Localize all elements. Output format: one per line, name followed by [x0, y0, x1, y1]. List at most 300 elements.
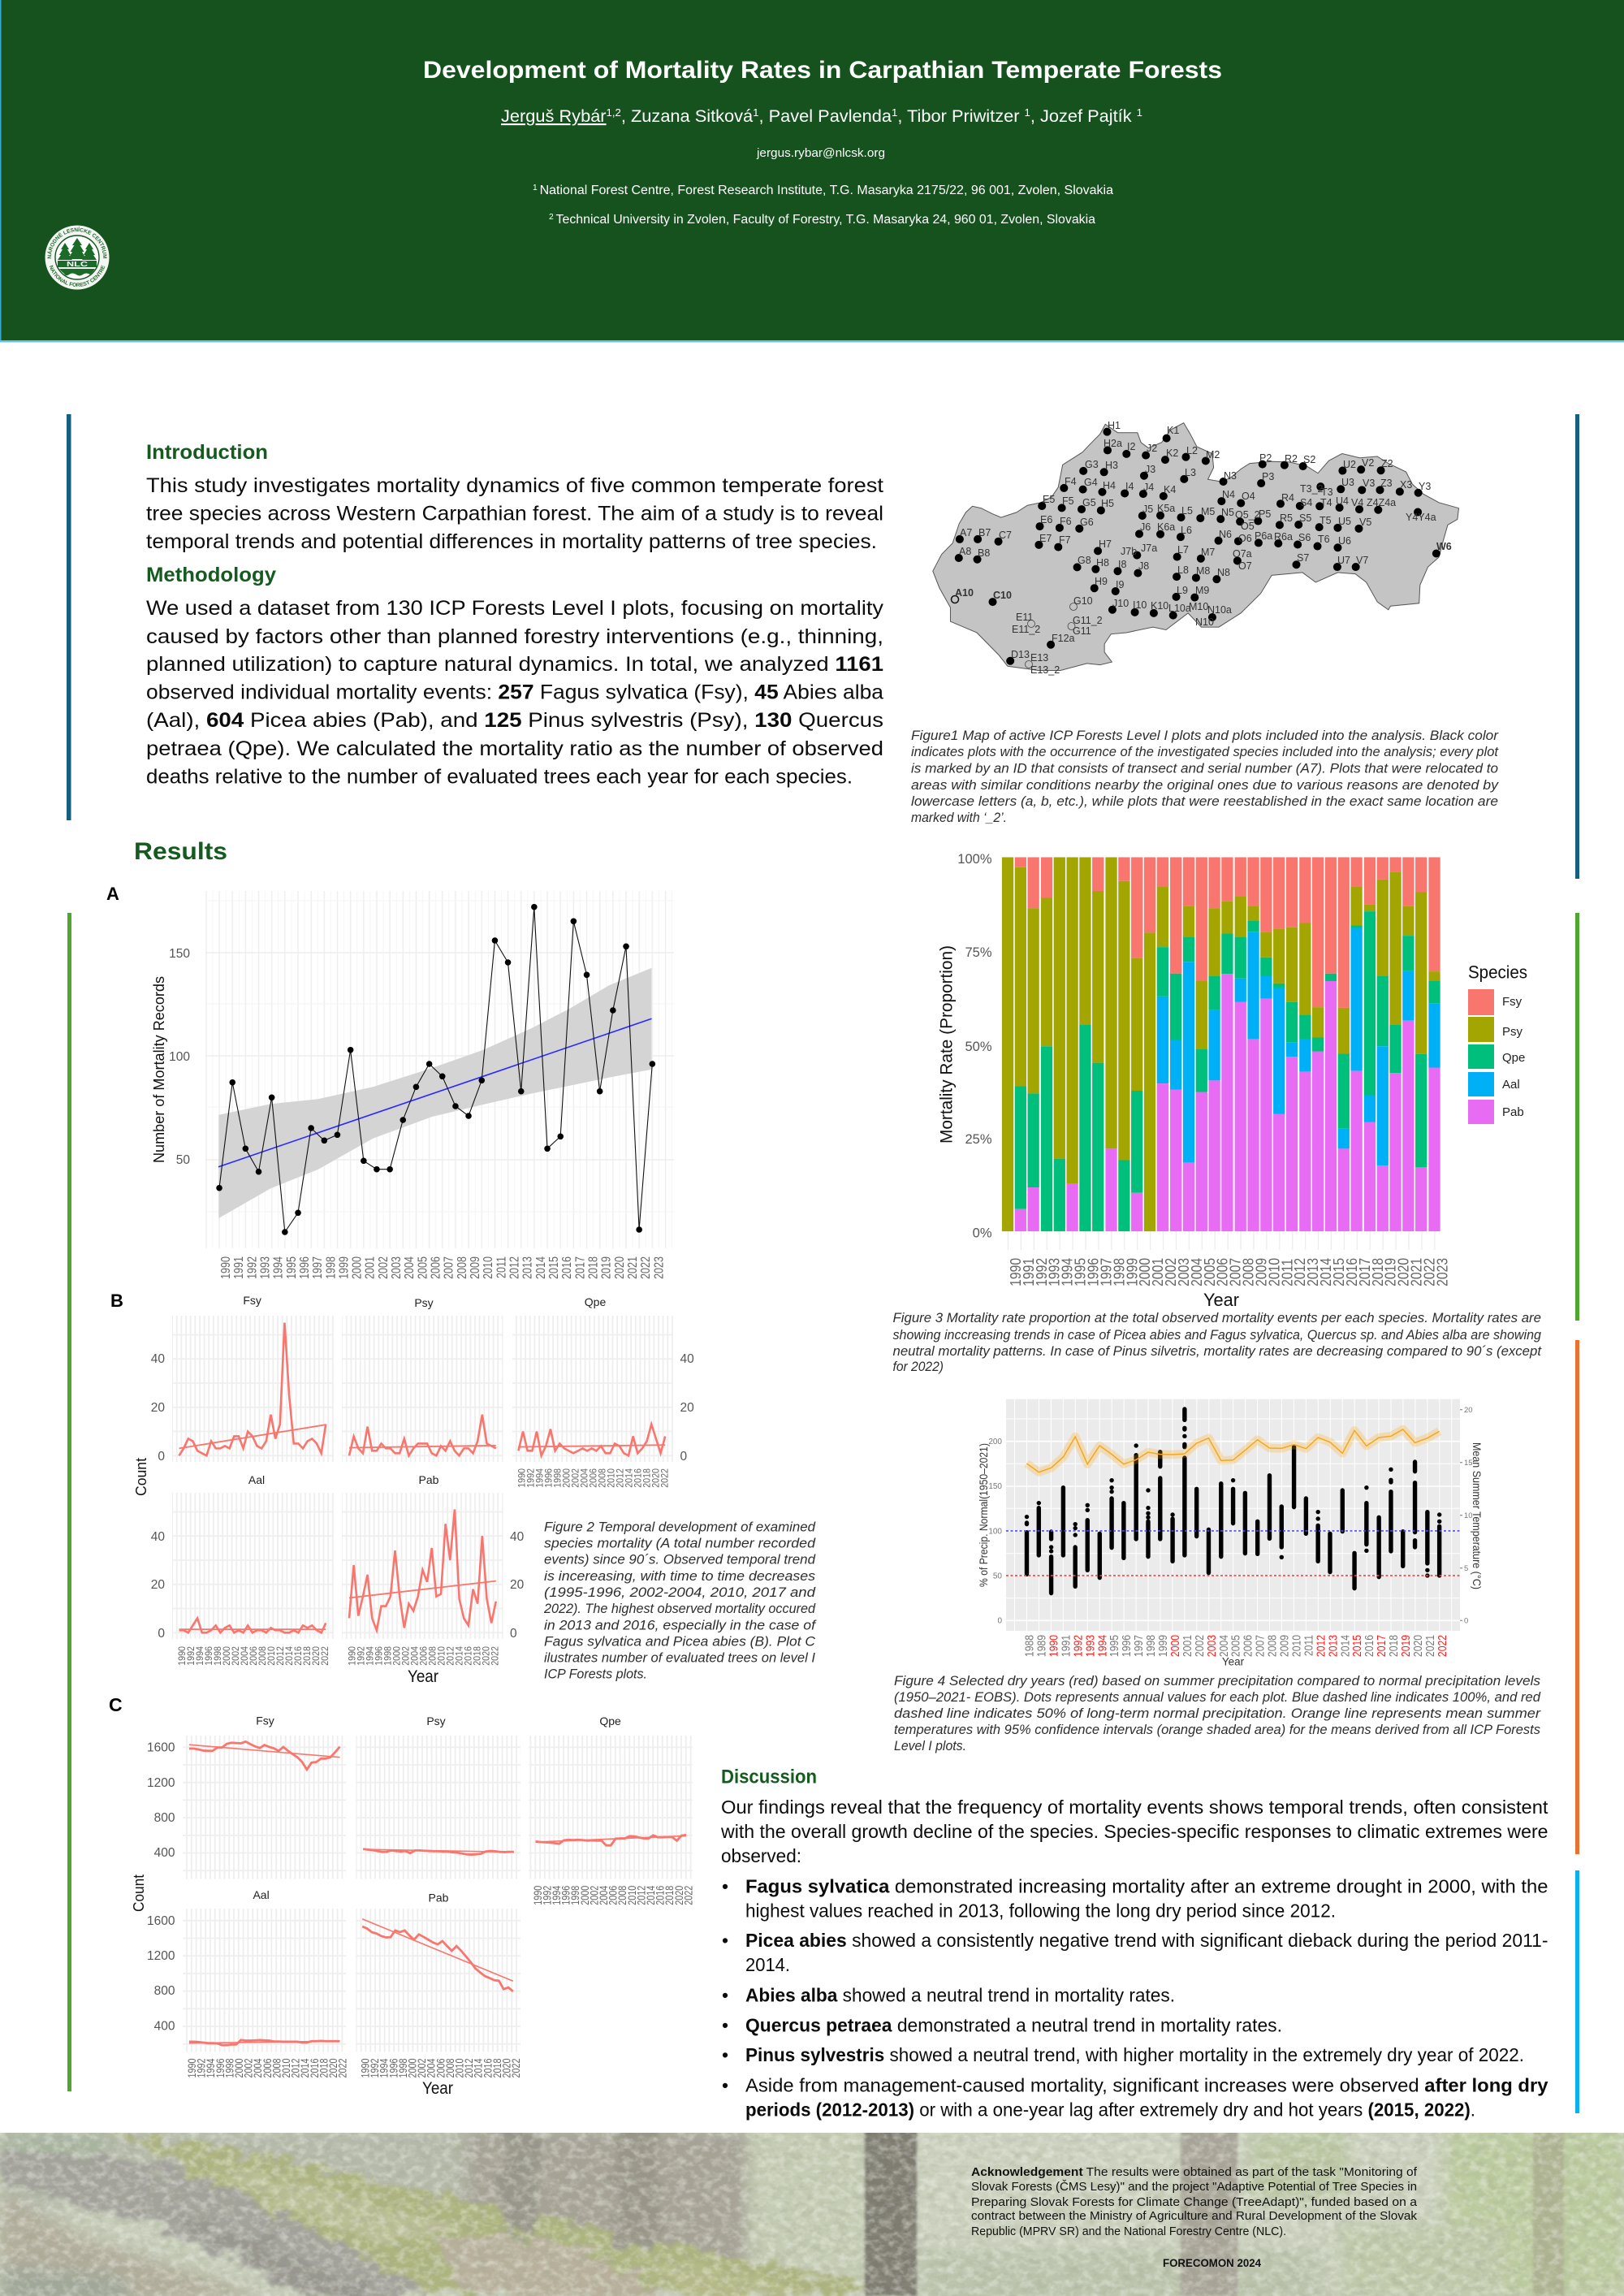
- map of ICP Forests plots: N5: [1221, 507, 1234, 518]
- map of ICP Forests plots: V2: [1362, 457, 1374, 469]
- discussion bullet list: •: [722, 2015, 728, 2036]
- legend: species: Species: [1468, 962, 1527, 983]
- x axis labels: 2009: [1252, 1258, 1270, 1286]
- map of ICP Forests plots: R6a: [1274, 531, 1293, 543]
- map of ICP Forests plots: H3: [1105, 460, 1118, 471]
- y axis labels: 0: [158, 1627, 165, 1641]
- y axis labels: 1200: [147, 1776, 175, 1790]
- map of ICP Forests plots: [933, 420, 1458, 676]
- right axis title: Mean Summer Temperature (°C): [1471, 1442, 1484, 1589]
- tree trunks: [865, 2128, 1564, 2296]
- facet: Fsy: [189, 1741, 339, 1770]
- authors: 1,2: [607, 106, 621, 119]
- x axis labels: 1993: [258, 1256, 273, 1279]
- x axis labels: 1999: [1156, 1635, 1169, 1657]
- map of ICP Forests plots: G11_2: [1073, 615, 1103, 626]
- temperature confidence band: [1026, 1429, 1440, 1472]
- right axis labels: 0: [1464, 1616, 1468, 1626]
- map of ICP Forests plots: J3: [1145, 464, 1155, 475]
- x axis labels: 1994: [1095, 1634, 1109, 1657]
- x axis labels: 1995: [1071, 1258, 1089, 1286]
- bars: Pab: [1015, 974, 1440, 1231]
- x axis labels: Qpe: 2004: [598, 1886, 610, 1905]
- map of ICP Forests plots: O4: [1242, 491, 1255, 502]
- figure 4 caption: Level I plots.: [894, 1738, 966, 1753]
- x axis labels: 2016: [1343, 1258, 1360, 1286]
- methodology text: caused by factors other than planned forestry interventions (e.g., thinning,: [146, 625, 883, 648]
- x axis labels: Aal: 2000: [233, 2058, 245, 2078]
- x axis labels: Pab: 2010: [453, 2058, 466, 2078]
- map of ICP Forests plots: R5: [1280, 512, 1293, 524]
- figure 3 caption: for 2022): [893, 1359, 944, 1374]
- discussion bullet list: periods (2012-2013) or with a one-year lag after extremely dry and hot years (2015, 2022).: [745, 2099, 1475, 2121]
- map of ICP Forests plots: J8: [1138, 560, 1149, 572]
- x axis labels: 2009: [469, 1256, 482, 1279]
- x axis labels: Aal: 1994: [205, 2058, 218, 2078]
- right axis ticks: [1460, 1410, 1462, 1620]
- methodology text: deaths relative to the number of evaluated trees each year for each species.: [146, 766, 853, 789]
- legend: species: Pab: [1502, 1105, 1524, 1119]
- x axis labels: Qpe: 2022: [682, 1886, 695, 1905]
- map of ICP Forests plots: G4: [1084, 477, 1098, 488]
- map of ICP Forests plots: F12a: [1052, 633, 1075, 644]
- map of ICP Forests plots: F4: [1065, 476, 1077, 487]
- x axis labels: Pab: 2016: [482, 2058, 495, 2078]
- map of ICP Forests plots: V7: [1356, 555, 1368, 566]
- figure 3 caption: neutral mortality patterns. In case of Pinus silvetris, mortality rates are decreasing compared to 90´s (except: [893, 1343, 1542, 1359]
- x axis labels: 2021: [1423, 1635, 1436, 1657]
- map of ICP Forests plots: N10a: [1207, 604, 1232, 616]
- x axis labels: Pab: 2010: [437, 1646, 447, 1666]
- map of ICP Forests plots: C7: [999, 530, 1012, 541]
- x axis labels: 2022: [639, 1256, 654, 1279]
- x axis labels: 1997: [1132, 1635, 1145, 1657]
- logo: National Forest Centre: NATIONAL FOREST CENTRE: [49, 265, 106, 287]
- title: Development of Mortality Rates in Carpathian Temperate Forests: [423, 57, 1222, 84]
- facet: Fsy: [179, 1323, 326, 1455]
- x axis labels: Pab: 2008: [428, 1646, 438, 1666]
- x axis labels: 1993: [1046, 1258, 1063, 1286]
- map of ICP Forests plots: N8: [1217, 567, 1230, 578]
- map of ICP Forests plots: H4: [1103, 480, 1116, 491]
- methodology text: planned utilization) to capture natural dynamics. In total, we analyzed 1161: [146, 653, 883, 676]
- figure 1 caption: is marked by an ID that consists of transect and serial number (A7). Plots that were relocated to: [911, 760, 1498, 776]
- x axis labels: Qpe: [517, 1468, 671, 1488]
- map of ICP Forests plots: O6: [1238, 533, 1252, 544]
- map of ICP Forests plots: F6: [1060, 516, 1072, 527]
- x axis labels: 2000: [1136, 1258, 1154, 1286]
- affiliation 2: Technical University in Zvolen, Faculty of Forestry, T.G. Masaryka 24, 960 01, Zvolen, Slovakia: [556, 213, 1095, 227]
- map of ICP Forests plots: G6: [1080, 517, 1094, 528]
- x axis labels: Pab: 2020: [482, 1646, 492, 1666]
- x axis labels: Pab: 1994: [378, 2058, 391, 2078]
- y axis labels: 100%: [957, 852, 992, 867]
- facet titles: Pab: [419, 1473, 439, 1486]
- x axis labels: Aal: 2014: [299, 2058, 312, 2078]
- figure 4 caption: temperatures with 95% confidence intervals (orange shaded area) for the means derived from all ICP Forests: [894, 1722, 1540, 1737]
- x axis labels: Aal: 2022: [336, 2058, 349, 2078]
- x axis labels: Pab: 1990: [348, 1646, 358, 1666]
- discussion intro text: observed:: [721, 1845, 801, 1866]
- x axis labels: Pab: 2022: [510, 2058, 522, 2078]
- authors: 1: [1025, 106, 1030, 119]
- x axis labels: Aal: 2000: [222, 1646, 232, 1666]
- x axis labels: Pab: 1996: [387, 2058, 400, 2078]
- legend: species: Qpe: [1502, 1051, 1525, 1065]
- x axis labels: Aal: 2006: [248, 1646, 259, 1666]
- y axis labels: 800: [154, 1984, 175, 1998]
- map of ICP Forests plots: J6: [1140, 521, 1151, 533]
- email: jergus.rybar@nlcsk.org: [756, 146, 885, 160]
- discussion bullet list: •: [722, 1876, 728, 1897]
- map of ICP Forests plots: J2: [1147, 443, 1157, 454]
- map of ICP Forests plots: Y3: [1419, 481, 1431, 492]
- x axis labels: 2012: [1291, 1258, 1309, 1286]
- x axis labels: 2014: [1338, 1634, 1352, 1657]
- y axis labels: 25%: [965, 1132, 992, 1147]
- introduction text: temporal trends and potential differences in mortality patterns of tree species.: [146, 530, 877, 553]
- x axis labels: 2002: [1162, 1258, 1179, 1286]
- map of ICP Forests plots: C10: [993, 590, 1012, 601]
- x axis labels: 2010: [482, 1256, 496, 1279]
- legend: species: Fsy: [1502, 995, 1522, 1009]
- map of ICP Forests plots: I4: [1125, 481, 1134, 492]
- map of ICP Forests plots: N6: [1219, 529, 1232, 540]
- y axis title: Number of Mortality Records: [151, 976, 167, 1163]
- x axis labels: Pab: 2006: [419, 1646, 430, 1666]
- map of ICP Forests plots: N4: [1222, 489, 1235, 500]
- x axis labels: Aal: 2012: [275, 1646, 286, 1666]
- figure 1 caption: marked with ‘_2’.: [911, 810, 1007, 825]
- x axis labels: Pab: 2012: [446, 1646, 456, 1666]
- x axis labels: 1990: [1047, 1635, 1060, 1657]
- x axis labels: Qpe: 2016: [654, 1886, 667, 1905]
- map of ICP Forests plots: O7a: [1233, 548, 1252, 560]
- y axis labels: 0: [158, 1450, 165, 1464]
- x axis labels: Pab: 1990: [359, 2058, 372, 2078]
- x axis labels: Aal: 2002: [242, 2058, 255, 2078]
- x axis labels: 2010: [1265, 1258, 1283, 1286]
- map of ICP Forests plots: K1: [1167, 425, 1179, 436]
- plot precipitation dots: [1026, 1409, 1440, 1593]
- x axis labels: Pab: 2002: [416, 2058, 428, 2078]
- chart: mortality rate proportion stacked bars: [937, 852, 1527, 1310]
- map of ICP Forests plots: I2: [1127, 441, 1135, 452]
- x axis labels: 1991: [1059, 1635, 1073, 1657]
- y axis labels: 40: [151, 1352, 165, 1366]
- x axis labels: Pab: 2012: [463, 2058, 475, 2078]
- map of ICP Forests plots: P6a: [1255, 530, 1272, 542]
- y axis labels: 20: [151, 1401, 165, 1415]
- heading: introduction: Introduction: [146, 441, 268, 464]
- x axis labels: Qpe: 2020: [651, 1468, 662, 1488]
- x axis labels: 2003: [390, 1256, 404, 1279]
- logo: National Forest Centre: NÁRODNÉ LESNÍCKE CENTRUM: [47, 227, 107, 258]
- introduction text: This study investigates mortality dynamics of five common temperate forest: [146, 474, 883, 497]
- x axis labels: Aal: 2018: [302, 1646, 313, 1666]
- map of ICP Forests plots: G10: [1073, 595, 1093, 607]
- x axis labels: Aal: 2018: [317, 2058, 330, 2078]
- label A: A: [106, 884, 119, 904]
- label C: C: [109, 1694, 123, 1715]
- x axis labels: 2002: [1193, 1635, 1206, 1657]
- x axis labels: 1998: [1110, 1258, 1128, 1286]
- x axis labels: 2015: [1330, 1258, 1347, 1286]
- map of ICP Forests plots: U4: [1336, 495, 1349, 507]
- map of ICP Forests plots: G8: [1078, 555, 1091, 566]
- map of ICP Forests plots: P2: [1259, 452, 1272, 464]
- x axis labels: 2000: [350, 1256, 365, 1279]
- x axis labels: Aal: 1990: [186, 2058, 198, 2078]
- authors: 1: [753, 106, 759, 119]
- x axis labels: Aal: 2010: [280, 2058, 292, 2078]
- x axis labels: 1995: [1108, 1635, 1121, 1657]
- x axis labels: 2007: [442, 1256, 456, 1279]
- x axis labels: 2007: [1226, 1258, 1244, 1286]
- x axis labels: 1989: [1035, 1635, 1048, 1657]
- x axis labels: 2009: [1278, 1635, 1291, 1657]
- x axis labels: Aal: 2014: [284, 1645, 295, 1666]
- x axis labels: Aal: [177, 1645, 330, 1666]
- x axis labels: 2001: [1181, 1635, 1194, 1657]
- map of ICP Forests plots: D13: [1011, 649, 1030, 660]
- x axis labels: 2008: [456, 1256, 469, 1279]
- discussion bullet list: Pinus sylvestris showed a neutral trend, with higher mortality in the extremely dry year of 2022.: [745, 2044, 1524, 2065]
- x axis labels: 2018: [1369, 1258, 1386, 1286]
- panel: methodology: [146, 564, 884, 789]
- discussion bullet list: 2014.: [745, 1954, 790, 1975]
- map of ICP Forests plots: L9: [1177, 585, 1188, 596]
- x axis labels: 2013: [520, 1256, 535, 1279]
- introduction text: tree species across Western Carpathian forest. The aim of a study is to reveal: [146, 502, 883, 525]
- x axis labels: 2013: [1326, 1635, 1340, 1657]
- map of ICP Forests plots: S6: [1298, 532, 1311, 543]
- map of ICP Forests plots: S2: [1303, 454, 1315, 465]
- figure 1 caption: [911, 728, 1500, 825]
- x axis labels: 2003: [1205, 1635, 1218, 1657]
- temperature line: [1026, 1429, 1440, 1472]
- figure 2 caption: ICP Forests plots.: [544, 1667, 647, 1682]
- map of ICP Forests plots: L10a: [1168, 603, 1191, 614]
- x axis labels: Qpe: 1990: [517, 1468, 528, 1488]
- y axis labels: 150: [169, 947, 190, 961]
- figure 4 caption: [894, 1673, 1541, 1753]
- y axis labels: [147, 1741, 175, 2034]
- map of ICP Forests plots: E11_2: [1012, 624, 1040, 635]
- x axis labels: 2012: [1314, 1635, 1328, 1657]
- x axis labels: Aal: [186, 2058, 349, 2078]
- x axis labels: Qpe: 2018: [663, 1886, 676, 1905]
- facet: Aal: [179, 1618, 326, 1632]
- x axis labels: Pab: 1992: [369, 2058, 381, 2078]
- map of ICP Forests plots: M8: [1196, 565, 1210, 577]
- authors: , Jozef Pajtík: [1030, 106, 1137, 126]
- x axis labels: 2004: [1188, 1257, 1205, 1286]
- map of ICP Forests plots: H9: [1095, 576, 1108, 587]
- methodology text: We used a dataset from 130 ICP Forests Level I plots, focusing on mortality: [146, 597, 884, 620]
- x axis labels: 2014: [534, 1256, 548, 1279]
- map of ICP Forests plots: M2: [1206, 449, 1220, 460]
- map of ICP Forests plots: K2: [1166, 448, 1178, 459]
- map of ICP Forests plots: J7a: [1141, 543, 1157, 554]
- x axis labels: Qpe: 1992: [541, 1886, 554, 1905]
- x axis labels: Qpe: 2022: [660, 1468, 671, 1488]
- facet titles: Fsy: [243, 1294, 261, 1307]
- x axis labels: 1998: [324, 1256, 339, 1279]
- panel: introduction: [146, 441, 883, 553]
- x axis labels: Qpe: 2020: [673, 1886, 685, 1905]
- x axis labels: 2011: [495, 1256, 509, 1278]
- map of ICP Forests plots: M5: [1201, 506, 1215, 517]
- x axis labels: 2020: [1411, 1635, 1424, 1657]
- x axis labels: Pab: [348, 1645, 501, 1666]
- affiliation 1: 1: [533, 184, 540, 192]
- discussion bullet list: highest values reached in 2013, following the long dry period since 2012.: [745, 1900, 1336, 1922]
- y axis labels: 1200: [147, 1949, 175, 1963]
- x axis labels: Qpe: 2018: [642, 1468, 653, 1488]
- y axis labels: 40: [151, 1530, 165, 1544]
- discussion bullet list: [722, 1876, 1548, 2121]
- figure 2 caption: Fagus sylvatica and Picea abies (B). Plot C: [544, 1634, 816, 1650]
- legend: species: Psy: [1502, 1025, 1523, 1039]
- x axis labels: 2018: [1387, 1635, 1400, 1657]
- map of ICP Forests plots: Z2: [1381, 458, 1393, 469]
- map of ICP Forests plots: U5: [1338, 516, 1351, 527]
- logo: National Forest Centre: NLC: [67, 261, 88, 268]
- x axis labels: 2004: [403, 1256, 417, 1279]
- x axis labels: 2006: [1213, 1258, 1231, 1286]
- x axis labels: Qpe: [532, 1886, 695, 1905]
- facet titles: Fsy: [256, 1714, 274, 1727]
- x axis labels: Aal: 2006: [261, 2058, 274, 2078]
- acknowledgement text: Preparing Slovak Forests for Climate Change (TreeAdapt)", funded based on a: [971, 2196, 1418, 2209]
- x axis labels: Pab: 1994: [365, 1645, 376, 1666]
- map of ICP Forests plots: X3: [1400, 479, 1412, 491]
- map of ICP Forests plots: W6: [1436, 541, 1452, 552]
- map of ICP Forests plots: P3: [1262, 471, 1274, 482]
- x axis labels: Aal: 1998: [223, 2058, 236, 2078]
- facet: Psy: [349, 1415, 496, 1455]
- figure 4 caption: (1950–2021- EOBS). Dots represents annual values for each plot. Blue dashed line indicates 100%, and red: [894, 1689, 1541, 1705]
- x axis labels: 1996: [1084, 1258, 1102, 1286]
- chart B: species mortality counts: [133, 1294, 694, 1686]
- x axis labels: Pab: 2018: [473, 1646, 483, 1666]
- left axis labels: 100: [988, 1527, 1002, 1537]
- map of ICP Forests plots: E13: [1030, 652, 1048, 664]
- x axis labels: Qpe: 2008: [598, 1468, 608, 1488]
- x axis labels: 1996: [298, 1256, 312, 1279]
- figure 1 caption: areas with similar conditions nearby the original ones due to various reasons are denoted by: [911, 777, 1500, 793]
- x axis labels: 2008: [1266, 1635, 1279, 1657]
- discussion bullet list: •: [722, 2075, 728, 2096]
- map of ICP Forests plots: L8: [1177, 564, 1189, 576]
- figure 4 caption: Figure 4 Selected dry years (red) based on summer precipitation compared to normal precipitation levels: [894, 1673, 1541, 1688]
- x axis labels: [1023, 1634, 1449, 1657]
- y axis labels: [151, 1352, 694, 1641]
- x axis title: Year: [408, 1667, 438, 1686]
- x axis labels: Pab: 2002: [401, 1646, 412, 1666]
- map of ICP Forests plots: M7: [1201, 547, 1215, 558]
- authors: 1: [1137, 106, 1142, 119]
- x axis labels: 2019: [1381, 1258, 1399, 1286]
- legend: species: Aal: [1502, 1078, 1520, 1092]
- x axis labels: Pab: 2006: [434, 2058, 447, 2078]
- x axis labels: 2015: [547, 1256, 561, 1279]
- x axis labels: Qpe: 1998: [569, 1886, 582, 1905]
- x axis labels: Aal: 1992: [186, 1646, 197, 1666]
- figure 3 caption: [893, 1310, 1542, 1374]
- x axis labels: Aal: 2008: [270, 2058, 283, 2078]
- x axis labels: Aal: 2010: [266, 1646, 277, 1666]
- x axis title: Year: [1203, 1290, 1239, 1310]
- map of ICP Forests plots: H2a: [1104, 438, 1122, 449]
- authors: , Zuzana Sitková: [621, 106, 753, 126]
- map of ICP Forests plots: K10: [1151, 600, 1168, 612]
- x axis labels: 1991: [1020, 1258, 1037, 1286]
- map of ICP Forests plots: S7: [1297, 552, 1309, 564]
- x axis labels: 1998: [1144, 1635, 1157, 1657]
- x axis labels: Aal: 2004: [252, 2058, 265, 2078]
- conference label: FORECOMON 2024: [1163, 2256, 1261, 2269]
- y axis labels: 0: [510, 1627, 517, 1641]
- map of ICP Forests plots: G5: [1082, 497, 1096, 508]
- discussion bullet list: •: [722, 1930, 728, 1951]
- x axis labels: Qpe: 2006: [607, 1886, 620, 1905]
- map of ICP Forests plots: K5a: [1157, 503, 1175, 514]
- facet titles: Aal: [248, 1473, 265, 1486]
- x axis labels: 2017: [573, 1256, 588, 1279]
- map of ICP Forests plots: J7b: [1121, 546, 1137, 557]
- map of ICP Forests plots: N10: [1195, 616, 1214, 628]
- map of ICP Forests plots: T5: [1320, 515, 1332, 526]
- x axis labels: 1990: [219, 1256, 233, 1279]
- discussion bullet list: Abies alba showed a neutral trend in mortality rates.: [745, 1985, 1175, 2006]
- x axis labels: Qpe: 2000: [562, 1468, 572, 1488]
- x axis labels: Aal: 2016: [293, 1646, 304, 1666]
- x axis labels: 2006: [1242, 1635, 1255, 1657]
- figure 1 caption: lowercase letters (a, b, etc.), while plots that were reestablished in the exact same location are: [911, 793, 1498, 809]
- x axis labels: Qpe: 2002: [588, 1886, 601, 1905]
- x axis labels: Qpe: 2004: [580, 1468, 590, 1488]
- y axis labels: 400: [154, 2019, 175, 2034]
- facet titles: Psy: [426, 1714, 446, 1727]
- affiliation 1: National Forest Centre, Forest Research Institute, T.G. Masaryka 2175/22, 96 001, Zvolen, Slovakia: [540, 184, 1113, 197]
- figure 2 caption: 2022). The highest observed mortality occured: [543, 1601, 816, 1616]
- facet titles: [243, 1294, 606, 1486]
- discussion bullet list: •: [722, 2044, 728, 2065]
- map of ICP Forests plots: J10: [1112, 598, 1129, 609]
- x axis labels: 2023: [1433, 1258, 1451, 1286]
- x axis labels: 2016: [560, 1256, 575, 1279]
- x axis labels: Aal: 1998: [213, 1646, 223, 1666]
- x axis labels: 2021: [626, 1256, 640, 1279]
- x axis labels: Pab: 2004: [410, 1645, 421, 1666]
- figure 2 caption: (1995-1996, 2002-2004, 2010, 2017 and: [544, 1585, 816, 1600]
- x axis labels: 2011: [1278, 1259, 1296, 1286]
- map of ICP Forests plots: G11: [1073, 625, 1091, 637]
- chart: dry years precipitation and temperature: [977, 1399, 1484, 1668]
- map of ICP Forests plots: V3: [1363, 478, 1375, 489]
- map of ICP Forests plots: I8: [1118, 559, 1126, 570]
- x axis labels: 2019: [599, 1256, 614, 1279]
- map of ICP Forests plots: U2: [1343, 459, 1356, 470]
- authors: , Tibor Priwitzer: [897, 106, 1025, 126]
- map of ICP Forests plots: U3: [1341, 477, 1354, 488]
- x axis labels: 2005: [1201, 1258, 1218, 1286]
- facet titles: Qpe: [599, 1714, 621, 1727]
- x axis labels: 1994: [271, 1256, 286, 1279]
- y axis labels: 400: [154, 1846, 175, 1860]
